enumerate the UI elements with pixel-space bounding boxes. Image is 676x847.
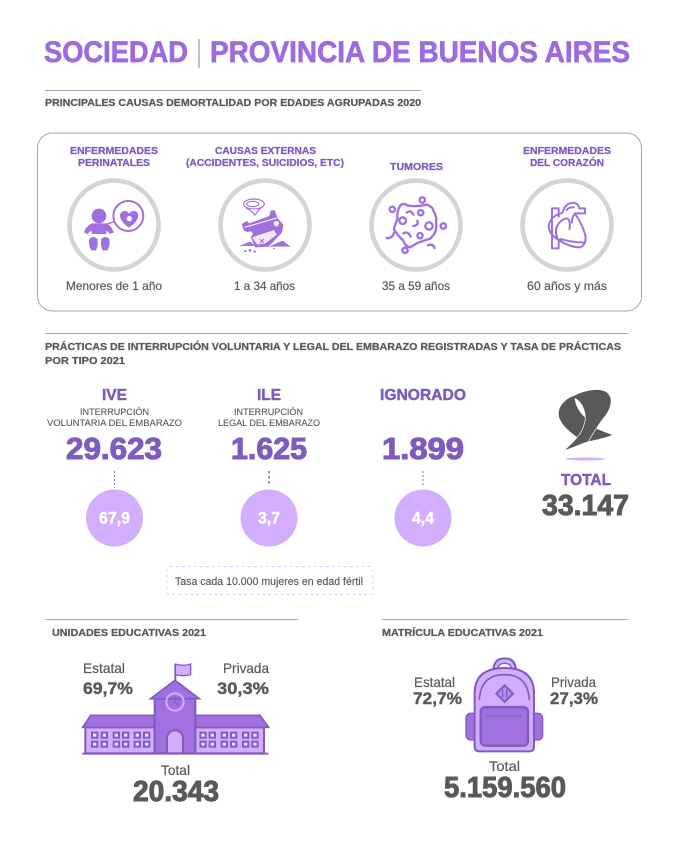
panel: matricula educativas: Estatal [414,674,455,690]
stat: ILE: LEGAL DEL EMBARAZO [218,418,320,429]
icon: school [82,664,269,755]
cause: enfermedades del corazon [522,145,612,293]
panel: matricula educativas: 5.159.560 [444,772,566,804]
panel: unidades educativas: Total [161,762,190,778]
stat: ILE: 3,7 [258,510,280,528]
icon: overturned car [239,199,291,253]
heading: principales causas: PRINCIPALES CAUSAS DEMORTALIDAD POR EDADES AGRUPADAS 2020 [45,98,421,109]
title [44,36,630,69]
cause: causas externas: 1 a 34 años [234,279,295,293]
cause: enfermedades perinatales: PERINATALES [78,157,150,169]
cause: tumores: 35 a 59 años [382,279,450,293]
stat: total with ribbon: TOTAL [561,472,611,489]
icon: baby with heart [84,201,143,250]
heading: practicas [45,340,621,367]
cause: enfermedades perinatales [66,145,162,293]
cause: enfermedades del corazon: 60 años y más [527,279,607,293]
stat: total with ribbon: 33.147 [542,490,629,522]
title: PROVINCIA DE BUENOS AIRES [210,36,630,69]
stat: ILE [218,387,320,546]
cause: causas externas: CAUSAS EXTERNAS [215,145,316,157]
stat: IVE: IVE [102,387,127,404]
panel: unidades educativas: Privada [223,660,269,676]
panel: matricula educativas: Total [489,758,520,774]
stat: IVE: 29.623 [66,431,162,466]
callout: tasa [167,566,373,594]
cause: enfermedades perinatales: Menores de 1 año [66,279,162,293]
stat: ignorado: IGNORADO [380,387,466,404]
stat: IVE [47,387,182,546]
panel: unidades educativas: 30,3% [217,680,269,698]
stat: ignorado: 4,4 [412,510,435,528]
cause: enfermedades perinatales: ENFERMEDADES [70,145,158,157]
heading: practicas: POR TIPO 2021 [45,356,125,367]
panel: matricula educativas: 27,3% [550,690,598,708]
icon: heart organ [549,203,586,248]
panel: unidades educativas [52,628,269,808]
stat: ILE: ILE [257,387,281,404]
panel: matricula educativas: 72,7% [413,690,462,708]
icon: backpack [466,658,543,751]
cause: causas externas: (ACCIDENTES, SUICIDIOS, ETC) [186,157,344,169]
stat: ignorado [380,387,466,546]
icon: tumor cell [387,197,446,253]
icon: ribbon [559,390,612,450]
panel: unidades educativas: 69,7% [83,680,133,698]
panel: matricula educativas: Privada [551,674,596,690]
cause: tumores [372,161,460,293]
stat: ILE: INTERRUPCIÓN [234,407,303,418]
stat: IVE: INTERRUPCIÓN [80,407,149,418]
cause: enfermedades del corazon: DEL CORAZÓN [530,156,604,169]
stat: ILE: 1.625 [231,431,307,466]
cause: causas externas [186,145,344,293]
panel: matricula educativas [382,626,598,804]
panel: unidades educativas: 20.343 [133,776,219,808]
cause: enfermedades del corazon: ENFERMEDADES [523,145,611,157]
panel: unidades educativas: Estatal [83,660,125,676]
stat: ignorado: 1.899 [382,431,464,466]
panel: causes of death [38,133,642,311]
panel: matricula educativas: MATRÍCULA EDUCATIVAS 2021 [382,626,543,639]
stat: total with ribbon [542,390,629,522]
callout: tasa: Tasa cada 10.000 mujeres en edad fértil [175,576,363,588]
heading: practicas: PRÁCTICAS DE INTERRUPCIÓN VOLUNTARIA Y LEGAL DEL EMBARAZO REGISTRADAS Y TASA DE PRÁCTICAS [45,340,621,353]
panel: unidades educativas: UNIDADES EDUCATIVAS 2021 [52,628,206,639]
stat: IVE: 67,9 [99,510,130,528]
title: SOCIEDAD [44,36,188,69]
cause: tumores: TUMORES [390,161,443,173]
stat: IVE: VOLUNTARIA DEL EMBARAZO [47,418,182,429]
